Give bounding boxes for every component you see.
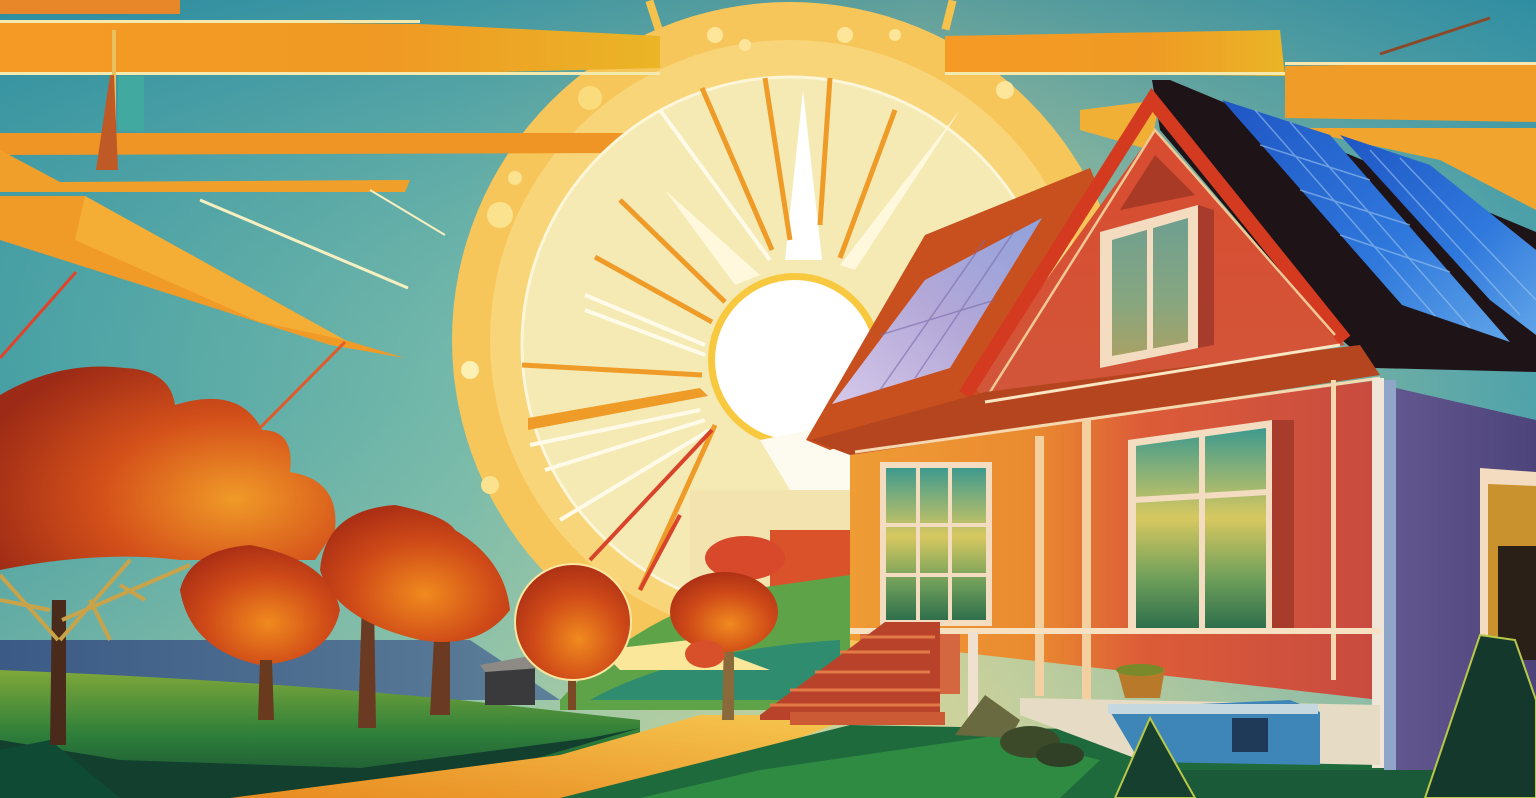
tree third	[515, 564, 631, 710]
house: foundation and planter	[1020, 664, 1380, 765]
bushes	[955, 695, 1084, 767]
house: upper window	[1100, 205, 1214, 368]
sun halo ring	[452, 0, 1128, 678]
big tree left	[0, 367, 340, 745]
house: blue solar panels	[1222, 100, 1536, 342]
house: left orange roof	[806, 168, 1095, 450]
sun inner disk	[522, 77, 1058, 613]
top right orange sky stripes	[945, 18, 1536, 210]
house: door	[1480, 468, 1536, 660]
tree second	[320, 505, 510, 728]
top left orange sky stripes	[0, 0, 660, 438]
house: eave band	[810, 345, 1380, 455]
house: left lower window	[880, 462, 992, 626]
sun core	[708, 273, 882, 490]
house: porch rail	[850, 628, 1380, 722]
house: dark roof	[1152, 80, 1536, 372]
sun rays	[522, 78, 960, 590]
house: main wall	[850, 380, 1380, 700]
distant horizon hills	[0, 490, 850, 710]
house: front steps	[760, 622, 945, 725]
house: lavender solar panel	[832, 218, 1042, 404]
house: large window	[1128, 420, 1294, 632]
house: purple side wall	[1396, 388, 1536, 770]
conifers	[1115, 635, 1536, 798]
house: wall trim posts	[1035, 378, 1396, 770]
house: gable roof edge	[965, 100, 1345, 400]
lawn and path	[0, 670, 1536, 798]
shed	[480, 655, 540, 705]
right lawn foreground	[1120, 770, 1536, 798]
tree fourth	[670, 536, 785, 720]
house: gable wall	[970, 130, 1345, 400]
